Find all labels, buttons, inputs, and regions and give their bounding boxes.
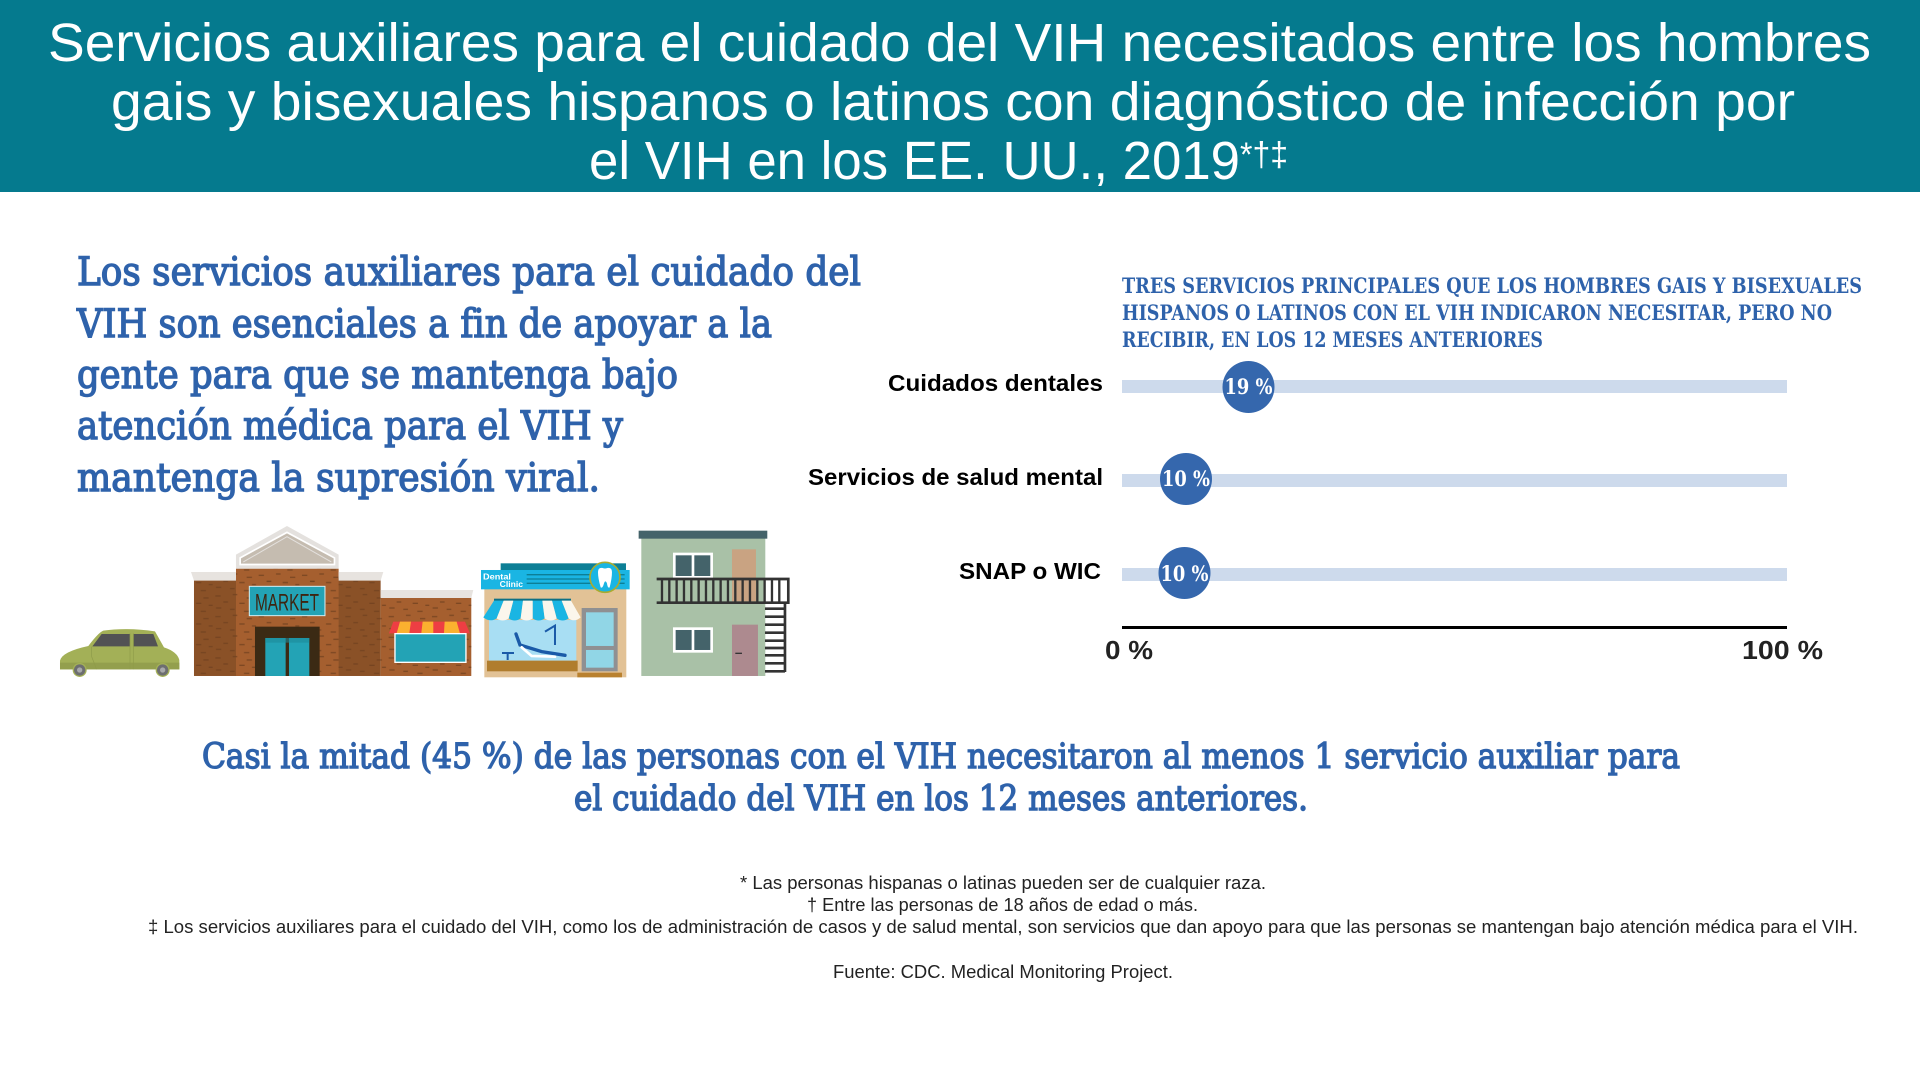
footnotes: [148, 873, 1858, 982]
intro statement: atención médica para el VIH y: [77, 404, 623, 449]
footnotes: ‡ Los servicios auxiliares para el cuidado del VIH, como los de administración de casos y de salud mental, son servicios que dan apoyo para que las personas se mantengan bajo atención médica para el VIH.: [148, 917, 1858, 937]
row: mental health: Servicios de salud mental: [808, 464, 1103, 490]
title text: *†‡: [1240, 136, 1288, 174]
clinic sign text: Dental: [483, 571, 511, 581]
intro statement: [76, 250, 861, 501]
title text: Servicios auxiliares para el cuidado del VIH necesitados entre los hombres: [48, 13, 1871, 73]
footnotes: † Entre las personas de 18 años de edad o más.: [807, 895, 1198, 915]
chart heading: RECIBIR, EN LOS 12 MESES ANTERIORES: [1122, 327, 1543, 352]
axis: 0 %: [1105, 635, 1153, 665]
key finding statement: Casi la mitad (45 %) de las personas con el VIH necesitaron al menos 1 servicio auxiliar para: [202, 737, 1680, 777]
icon: green car: [60, 629, 179, 677]
title text: gais y bisexuales hispanos o latinos con diagnóstico de infección por: [111, 72, 1795, 132]
row: mental health: 10 %: [1162, 466, 1210, 491]
row: dental care: Cuidados dentales: [888, 370, 1103, 396]
row: dental care: 19 %: [1224, 374, 1273, 399]
icon: dental clinic: Clinic: [500, 579, 523, 589]
title text: el VIH en los EE. UU., 2019: [589, 131, 1240, 191]
row: SNAP or WIC: SNAP o WIC: [959, 558, 1101, 584]
key finding statement: el cuidado del VIH en los 12 meses anteriores.: [574, 779, 1308, 819]
axis: [1105, 626, 1823, 665]
intro statement: gente para que se mantenga bajo: [77, 353, 678, 398]
row: mental health: [808, 453, 1787, 505]
bar chart: [808, 361, 1823, 665]
row: dental care: [888, 361, 1787, 413]
intro statement: Los servicios auxiliares para el cuidado del: [77, 250, 861, 295]
intro statement: mantenga la supresión viral.: [77, 456, 600, 501]
key finding statement: [202, 737, 1680, 819]
row: SNAP or WIC: 10 %: [1160, 561, 1209, 586]
chart heading: [1122, 273, 1862, 352]
title banner: [0, 0, 1920, 192]
icon: apartment house: [639, 531, 788, 676]
footnotes: * Las personas hispanas o latinas pueden ser de cualquier raza.: [740, 873, 1266, 893]
intro statement: VIH son esenciales a fin de apoyar a la: [76, 302, 772, 347]
axis: 100 %: [1742, 635, 1823, 665]
footnotes: Fuente: CDC. Medical Monitoring Project.: [833, 962, 1173, 982]
title text: [48, 13, 1871, 191]
row: SNAP or WIC: [959, 547, 1787, 599]
icon: dental clinic: [481, 562, 630, 677]
icon: market building: MARKET: [255, 589, 319, 616]
icon: market building: [191, 526, 473, 676]
